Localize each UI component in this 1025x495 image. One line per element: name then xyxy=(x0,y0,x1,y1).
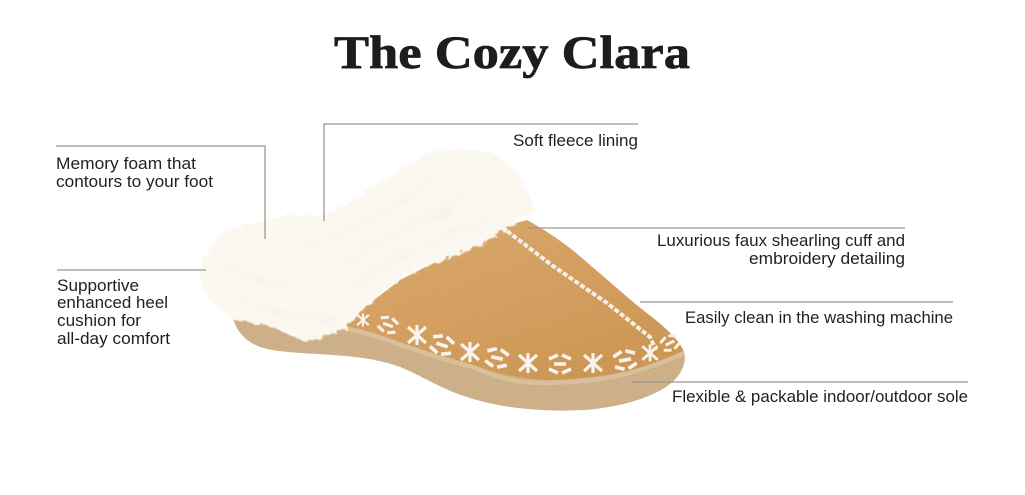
callout: memory foam: contours to your foot xyxy=(56,172,213,191)
fur cuff xyxy=(200,148,535,342)
callout: sole: Flexible & packable indoor/outdoor sole xyxy=(672,387,968,406)
callout: soft fleece lining xyxy=(324,124,638,221)
callout: shearling cuff and embroidery xyxy=(527,228,905,268)
callout: heel cushion: cushion for xyxy=(57,311,141,330)
fur shading xyxy=(225,180,500,320)
sole xyxy=(233,317,685,411)
callout: shearling cuff and embroidery: Luxurious faux shearling cuff and xyxy=(657,231,905,250)
callout: heel cushion xyxy=(57,270,206,348)
callout: memory foam xyxy=(56,146,265,239)
upper: suede xyxy=(340,220,684,380)
callout: washing machine: Easily clean in the washing machine xyxy=(685,308,953,327)
callout: heel cushion: all-day comfort xyxy=(57,329,170,348)
embroidery: snowflake band xyxy=(357,314,681,373)
embroidery: stitched line xyxy=(507,231,656,350)
slipper illustration xyxy=(200,148,685,411)
callout: memory foam: Memory foam that xyxy=(56,154,196,173)
welt edge xyxy=(343,328,684,383)
callout: heel cushion: enhanced heel xyxy=(57,293,168,312)
callout: soft fleece lining: Soft fleece lining xyxy=(513,131,638,150)
callout: heel cushion: Supportive xyxy=(57,276,139,295)
title: The Cozy Clara xyxy=(334,27,690,79)
callout: shearling cuff and embroidery: embroidery detailing xyxy=(749,249,905,268)
